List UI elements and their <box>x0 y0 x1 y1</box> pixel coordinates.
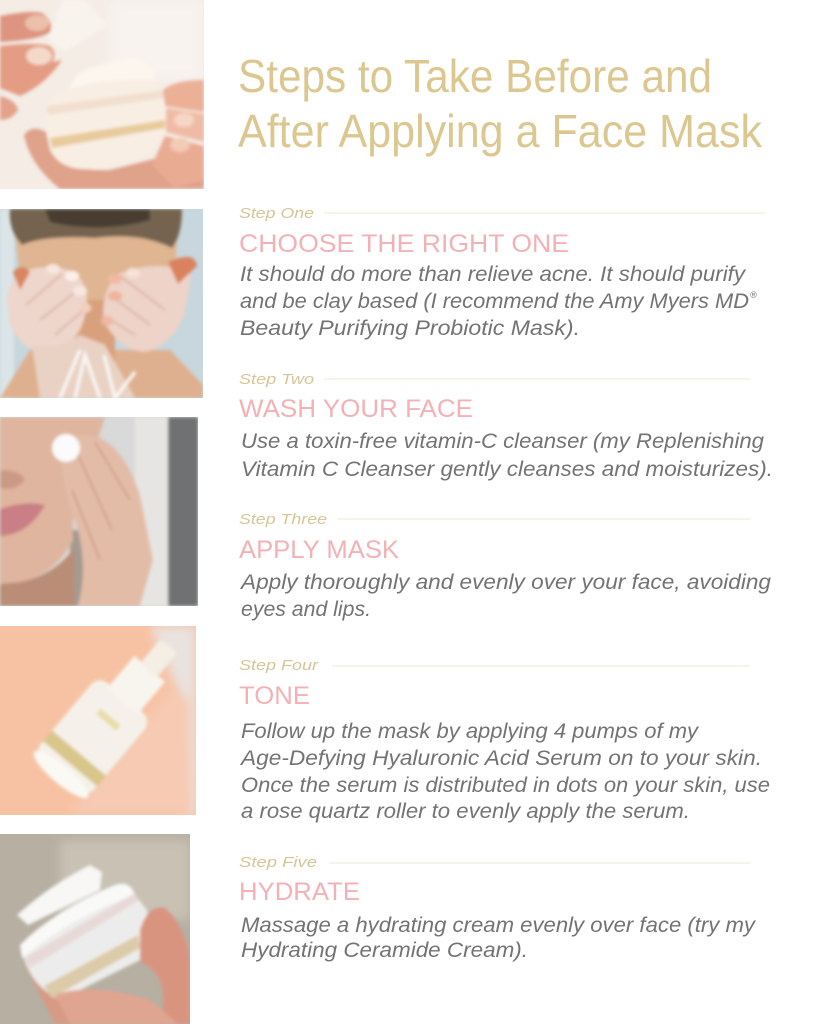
body text: eyes and lips. <box>241 598 371 621</box>
body text: Hydrating Ceramide Cream). <box>241 939 528 962</box>
photo: hands opening jar <box>0 0 204 189</box>
body text: Apply thoroughly and evenly over your face, avoiding <box>239 571 771 594</box>
step label: Step One <box>239 205 314 222</box>
photo: cotton pad on cheek <box>0 417 198 606</box>
body text: and be clay based (I recommend the Amy Myers MD <box>240 290 749 313</box>
body text: Massage a hydrating cream evenly over face (try my <box>241 914 757 937</box>
body text: Follow up the mask by applying 4 pumps of my <box>241 720 700 743</box>
step label: Step Two <box>239 371 314 388</box>
heading: TONE <box>239 682 310 710</box>
body text: It should do more than relieve acne. It should purify <box>240 263 747 286</box>
step label: Step Four <box>239 657 319 674</box>
step label: Step Three <box>239 511 327 528</box>
title <box>238 50 763 157</box>
heading: WASH YOUR FACE <box>239 395 473 423</box>
photo: washing face <box>0 209 203 398</box>
step label: Step Five <box>239 854 317 871</box>
body text <box>241 914 757 962</box>
body text <box>239 720 770 823</box>
body text <box>239 571 771 621</box>
body text: Vitamin C Cleanser gently cleanses and moisturizes). <box>241 458 773 481</box>
body text: Beauty Purifying Probiotic Mask). <box>240 317 580 340</box>
step one <box>239 205 765 340</box>
body text: Once the serum is distributed in dots on your skin, use <box>241 774 770 797</box>
step three <box>239 511 771 621</box>
title: Steps to Take Before and <box>238 50 712 102</box>
step five <box>239 854 757 962</box>
photo: hand holding cream jar <box>0 834 190 1024</box>
photo: serum bottle on towel <box>0 623 196 815</box>
step four <box>239 657 770 823</box>
heading: HYDRATE <box>239 878 360 906</box>
heading: CHOOSE THE RIGHT ONE <box>239 230 569 258</box>
step two <box>239 371 773 481</box>
body text: Age-Defying Hyaluronic Acid Serum on to your skin. <box>239 747 762 770</box>
body text <box>241 430 773 481</box>
body text: Use a toxin-free vitamin-C cleanser (my Replenishing <box>241 430 764 453</box>
heading: APPLY MASK <box>239 536 399 564</box>
body text <box>240 263 757 340</box>
body text: ® <box>750 290 757 300</box>
body text: a rose quartz roller to evenly apply the serum. <box>241 800 690 823</box>
title: After Applying a Face Mask <box>238 105 763 157</box>
